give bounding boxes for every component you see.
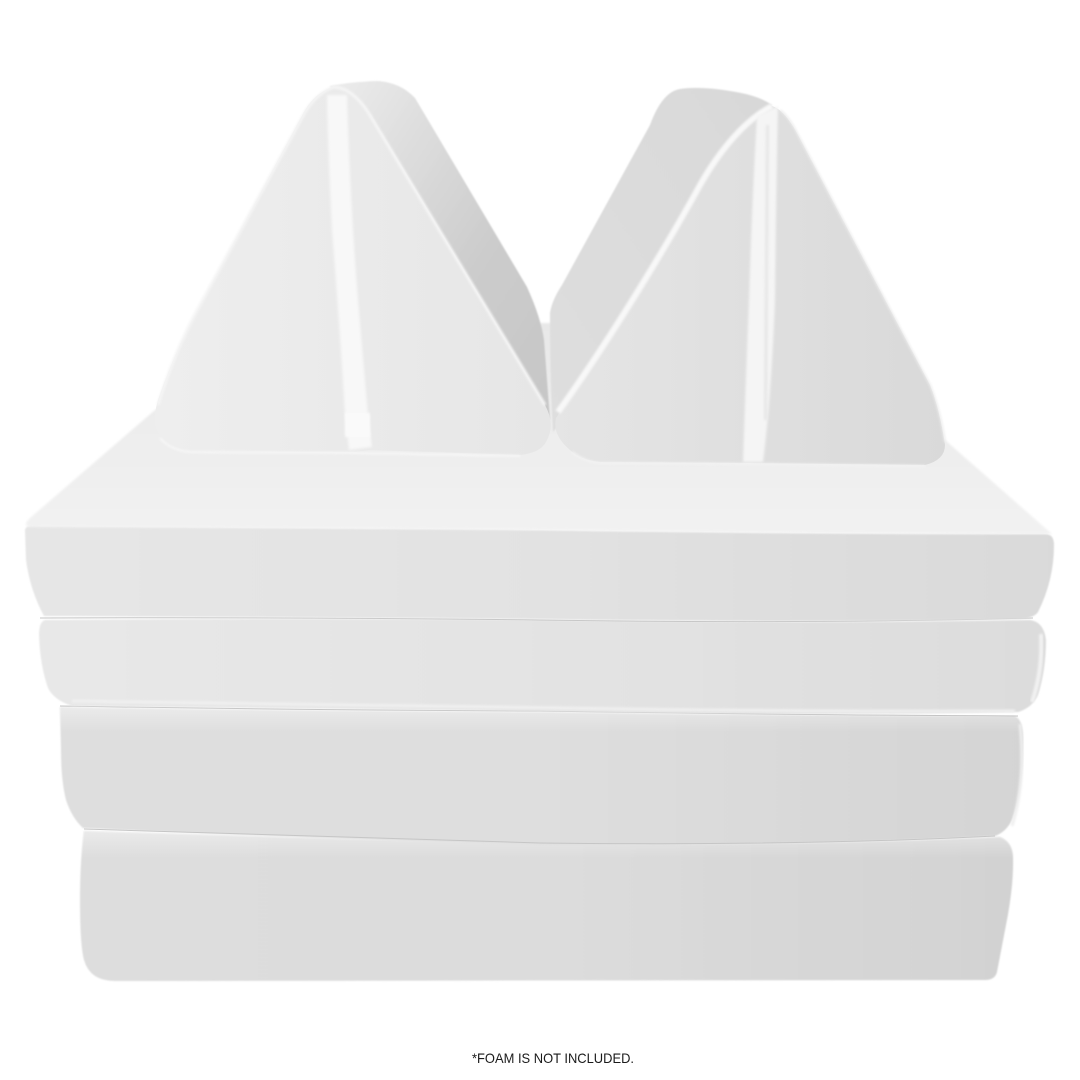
right wedge: edge piping — [558, 106, 772, 412]
layer 1: top mattress front face — [25, 526, 1054, 621]
right wedge: front face — [555, 106, 945, 465]
left wedge: bottom highlight — [160, 438, 520, 456]
right wedge cushion — [550, 88, 945, 466]
right wedge: bottom highlight — [572, 452, 925, 466]
right wedge: zipper — [743, 106, 778, 462]
footnote: *FOAM IS NOT INCLUDED. — [472, 1050, 634, 1066]
layer 1: top surface — [26, 323, 1052, 534]
left wedge: zipper end tab — [345, 413, 370, 437]
left wedge: front face — [155, 87, 551, 455]
right wedge: back side — [550, 88, 772, 432]
left wedge: edge piping — [158, 87, 545, 405]
mattress stack — [25, 323, 1054, 981]
left wedge: back side — [330, 81, 550, 420]
left wedge cushion — [155, 81, 551, 456]
layer 2: second cushion — [39, 619, 1046, 714]
layer 3: third cushion — [60, 707, 1023, 845]
left wedge: zipper — [327, 95, 372, 450]
layer 4: bottom cushion — [80, 831, 1013, 981]
